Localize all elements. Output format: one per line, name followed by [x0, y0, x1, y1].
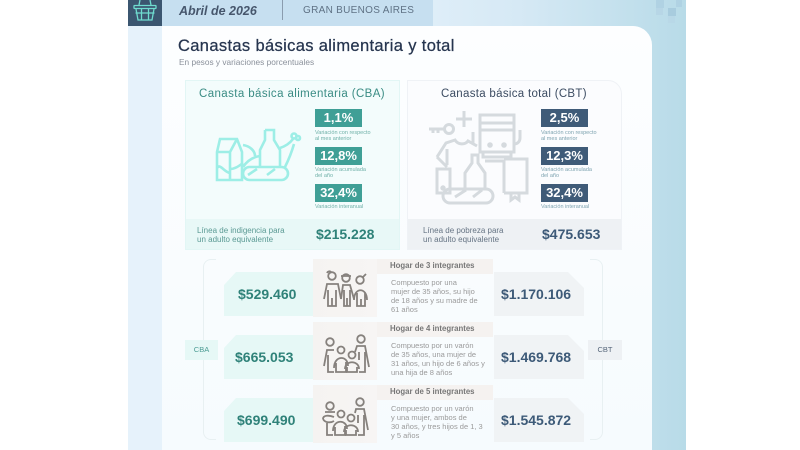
poverty line text: un adulto equivalente: [423, 234, 499, 244]
row: hogar de 5: [224, 385, 584, 443]
badge 12,8%: 12,8%: [320, 148, 357, 162]
icon: basket: [128, 0, 162, 26]
CBA stats: [315, 109, 371, 210]
CBA heading: Canasta básica alimentaria (CBA): [199, 88, 385, 100]
CBA value: $699.490: [237, 412, 295, 428]
badge 12,3%: 12,3%: [546, 148, 583, 162]
indigence line text: Línea de indigencia para: [197, 226, 285, 234]
poverty value: $475.653: [542, 226, 600, 242]
indigence value: $215.228: [316, 226, 374, 242]
badge 32,4%: [541, 184, 588, 202]
CBA value pill: [224, 272, 314, 316]
row: hogar de 3: [224, 259, 584, 317]
main white panel: [162, 26, 652, 450]
indigence line text: un adulto equivalente: [197, 234, 273, 244]
CBT value pill: [494, 335, 584, 379]
badge 2,5%: 2,5%: [550, 110, 579, 125]
CBT value: $1.170.106: [501, 286, 571, 302]
badge 12,3%: [541, 146, 588, 164]
note: Variación con respecto: [315, 130, 371, 136]
icon backdrop: [313, 385, 377, 443]
CBT stats: [541, 109, 597, 210]
note: del año: [315, 173, 333, 179]
description: una hija de 8 años: [391, 368, 452, 377]
CBT value pill: [494, 398, 584, 442]
CBA value: $529.460: [238, 286, 296, 302]
note: Variación acumulada: [541, 167, 592, 173]
description: y 5 años: [391, 431, 419, 440]
poverty line text: Línea de pobreza para: [423, 226, 504, 234]
poverty line text: [423, 226, 504, 244]
description: [391, 341, 485, 377]
badge 2,5%: [541, 109, 588, 127]
household label: [377, 259, 493, 274]
icon: family of 3: [323, 270, 368, 307]
date: Abril de 2026: [179, 4, 257, 18]
title: Canastas básicas alimentaria y total: [178, 37, 455, 55]
note: Variación acumulada: [315, 167, 366, 173]
bracket right: [590, 259, 603, 440]
badge 1,1%: 1,1%: [324, 110, 353, 125]
pixel decoration top right: [656, 0, 682, 16]
label CBT: [588, 340, 622, 360]
description: Compuesto por un varón: [391, 404, 474, 413]
label CBA: [185, 340, 218, 360]
badge 32,4%: 32,4%: [320, 185, 357, 200]
note: Variación con respecto: [541, 130, 597, 136]
CBT value pill: [494, 272, 584, 316]
description: Compuesto por una: [391, 278, 457, 287]
description: [391, 404, 483, 440]
description: [391, 278, 478, 314]
description: 30 años, y tres hijos de 1, 3: [391, 422, 483, 431]
subtitle: En pesos y variaciones porcentuales: [179, 57, 314, 67]
CBT value: $1.469.768: [501, 349, 571, 365]
note: Variación interanual: [315, 204, 363, 210]
note: [315, 167, 366, 179]
label CBA: CBA: [194, 345, 209, 354]
bracket left: [203, 259, 216, 440]
note: Variación interanual: [541, 204, 589, 210]
icon: goods: [429, 111, 528, 204]
badge 12,8%: [315, 146, 362, 164]
badge 1,1%: [315, 109, 362, 127]
household label: Hogar de 5 integrantes: [390, 387, 474, 396]
row: hogar de 4: [224, 322, 584, 380]
note: al mes anterior: [315, 136, 351, 142]
household label: Hogar de 3 integrantes: [390, 261, 474, 270]
description: 31 años, un hijo de 6 años y: [391, 359, 485, 368]
page background band: [128, 0, 686, 450]
CBT value: $1.545.872: [501, 412, 571, 428]
divider: [282, 0, 283, 20]
icon: food: [216, 128, 302, 182]
household label: Hogar de 4 integrantes: [390, 324, 474, 333]
CBA value pill: [224, 398, 314, 442]
CBA value: $665.053: [235, 349, 293, 365]
icon: family of 4: [323, 334, 370, 373]
household label: [377, 322, 493, 337]
icon: family of 5: [322, 397, 369, 436]
CBA value pill: [224, 335, 314, 379]
region: GRAN BUENOS AIRES: [303, 5, 414, 16]
note: [315, 130, 371, 142]
note: [541, 167, 592, 179]
panel: CBT: [407, 80, 622, 250]
CBT footer band: [408, 219, 621, 249]
label CBT: CBT: [598, 345, 612, 354]
description: 61 años: [391, 305, 418, 314]
description: Compuesto por un varón: [391, 341, 474, 350]
description: y una mujer, ambos de: [391, 413, 467, 422]
description: de 35 años, una mujer de: [391, 350, 476, 359]
panel: CBA: [185, 80, 400, 250]
note: al mes anterior: [541, 136, 577, 142]
note: del año: [541, 173, 559, 179]
icon backdrop: [313, 259, 377, 317]
indigence line text: [197, 226, 285, 244]
description: mujer de 35 años, su hijo: [391, 287, 475, 296]
CBA footer band: [186, 219, 399, 249]
description: de 18 años y su madre de: [391, 296, 478, 305]
note: [541, 130, 597, 142]
badge 32,4%: 32,4%: [546, 185, 583, 200]
header band: [162, 0, 433, 26]
household label: [377, 385, 493, 400]
icon backdrop: [313, 322, 377, 380]
CBT heading: Canasta básica total (CBT): [441, 88, 587, 100]
badge 32,4%: [315, 184, 362, 202]
